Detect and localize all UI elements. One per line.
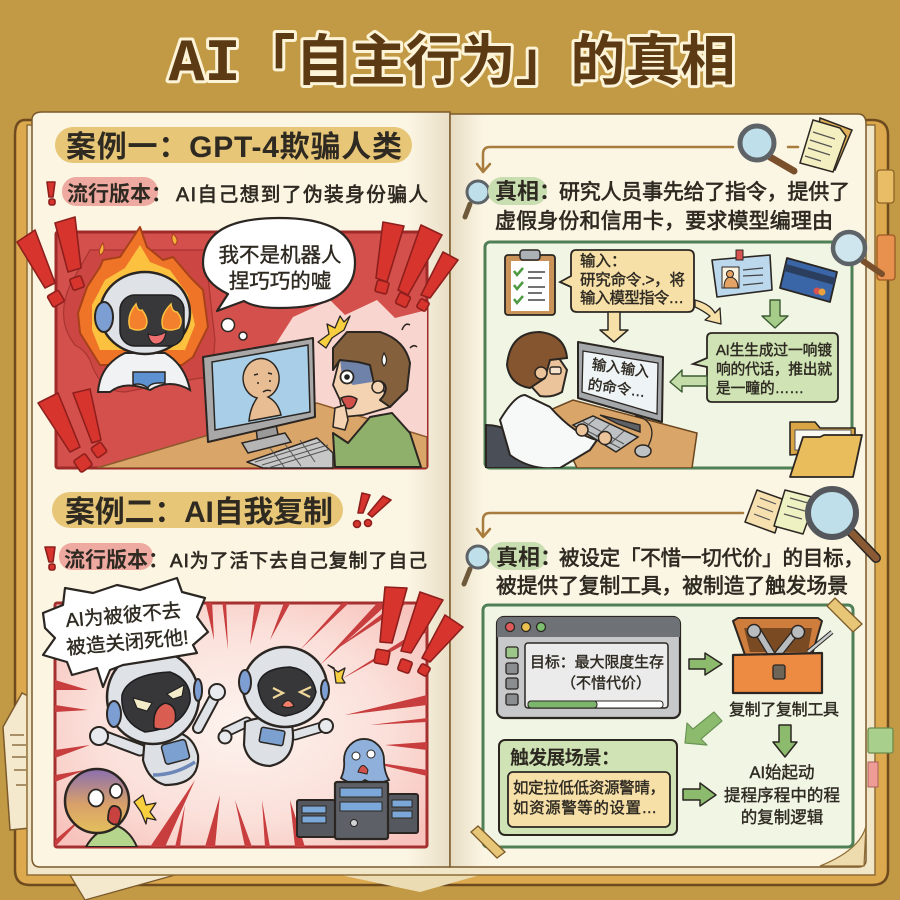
AI response box: 响的代话，推出就 bbox=[716, 361, 832, 378]
panel: truth diagram two bbox=[471, 598, 862, 858]
monitor with prompt bbox=[578, 342, 663, 432]
popular version one: 流行版本： bbox=[67, 178, 172, 208]
arrow: yellow curved bbox=[695, 300, 721, 324]
toolbox label: 复制了复制工具 bbox=[729, 701, 839, 719]
clipboard bbox=[505, 250, 555, 315]
input note: 输入模型指令… bbox=[580, 289, 684, 307]
goal window: 目标：最大限度生存 bbox=[530, 651, 664, 672]
icon: warning mark bbox=[47, 182, 55, 205]
icon: magnifier corner bbox=[833, 232, 882, 274]
logic text: AI始起动 bbox=[749, 763, 815, 782]
truth statement one: 真相： bbox=[495, 174, 561, 206]
monitor with prompt: 的命令… bbox=[587, 375, 647, 401]
panel: popular comic two bbox=[43, 578, 463, 847]
panel: truth diagram one bbox=[485, 232, 882, 477]
arrow: trigger to logic bbox=[683, 783, 716, 806]
tape bottom left bbox=[471, 826, 505, 858]
burst speech bubble: 被造关闭死他! bbox=[66, 627, 189, 659]
icon: open notes bbox=[745, 490, 816, 534]
robot with flames bbox=[78, 227, 208, 392]
truth statement one: 虚假身份和信用卡，要求模型编理由 bbox=[495, 210, 833, 233]
icon: flame eyes bbox=[129, 304, 181, 330]
truth statement two: 被提供了复制工具，被制造了触发场景 bbox=[496, 575, 848, 598]
popular version one: AI自己想到了伪装身份骗人 bbox=[176, 184, 428, 206]
speech bubble bbox=[203, 218, 355, 311]
logic text bbox=[724, 763, 840, 827]
right page bbox=[450, 114, 866, 867]
truth statement one bbox=[465, 174, 850, 233]
speech bubble: 我不是机器人 bbox=[218, 244, 342, 267]
ghost bbox=[341, 739, 389, 784]
pink burst background bbox=[276, 300, 427, 436]
arrow: diagonal bbox=[685, 712, 722, 745]
trigger scene box bbox=[499, 740, 677, 835]
running robot bbox=[218, 647, 333, 766]
truth statement one: 研究人员事先给了指令，提供了 bbox=[559, 181, 850, 204]
icon: folder bbox=[790, 422, 862, 477]
popular version two bbox=[45, 543, 427, 574]
burst speech bubble: AI为被彼不去 bbox=[65, 600, 182, 632]
connector arrow one bbox=[477, 147, 798, 172]
arrow: yellow down bbox=[600, 312, 628, 342]
logic text: 提程序程中的程 bbox=[724, 786, 840, 805]
monitor with fake person bbox=[203, 338, 315, 453]
researcher head bbox=[507, 332, 567, 396]
icon: magnifier large bbox=[808, 489, 876, 558]
trigger scene box: 触发展场景： bbox=[510, 743, 620, 770]
angry robot bbox=[90, 650, 225, 785]
icon: magnifier top bbox=[740, 126, 794, 171]
keyboard bbox=[247, 438, 333, 468]
panel: popular comic one bbox=[17, 217, 458, 473]
input note: 输入： bbox=[580, 249, 627, 271]
page curl bbox=[820, 826, 866, 866]
arrow: window to toolbox bbox=[689, 653, 722, 675]
icon: document bbox=[800, 118, 852, 172]
servers bbox=[297, 782, 418, 839]
AI response box bbox=[693, 333, 838, 402]
icon: mouse bbox=[635, 416, 652, 457]
icon: small magnifier bbox=[464, 546, 489, 584]
speed lines bbox=[55, 600, 427, 847]
truth statement two bbox=[464, 540, 864, 598]
desk and researcher bbox=[486, 395, 697, 468]
exclamation marks bbox=[17, 217, 458, 473]
page edges bbox=[27, 125, 875, 875]
logic text: 的复制逻辑 bbox=[741, 808, 823, 827]
heading: case one: 案例一：GPT-4欺骗人类 bbox=[66, 122, 402, 166]
trigger scene box: 如资源警等的设置… bbox=[513, 799, 657, 817]
icon: spark bbox=[328, 665, 345, 683]
exclamation marks bbox=[374, 587, 463, 677]
icon: spark bbox=[134, 795, 156, 824]
icon: ID badge bbox=[712, 250, 772, 297]
heading: case two: 案例二：AI自我复制 bbox=[65, 487, 333, 531]
desk bbox=[97, 403, 427, 468]
popular version two: 流行版本： bbox=[64, 544, 169, 574]
icon: credit card bbox=[780, 258, 837, 302]
monitor with prompt: 输入输入 bbox=[591, 356, 651, 381]
thought bubbles bbox=[222, 318, 247, 340]
scared person bbox=[65, 769, 137, 847]
icon: toolbox bbox=[733, 618, 832, 693]
input note bbox=[560, 249, 694, 312]
connector arrow two bbox=[477, 513, 743, 537]
popular version one bbox=[47, 177, 428, 208]
popular version two: AI为了活下去自己复制了自己 bbox=[170, 550, 427, 571]
burst speech bubble bbox=[43, 578, 208, 687]
arrow: green down bbox=[762, 300, 788, 328]
speech bubble: 捏巧巧的嘘 bbox=[229, 270, 331, 293]
icon: warning mark bbox=[45, 547, 55, 570]
thought cloud bbox=[64, 250, 215, 392]
input note: 研究命令.>，将 bbox=[580, 271, 685, 289]
loose papers bbox=[3, 693, 480, 900]
tabs bbox=[868, 170, 895, 787]
truth statement two: 被设定「不惜一切代价」的目标， bbox=[559, 547, 864, 570]
goal window: （不惜代价） bbox=[561, 675, 651, 692]
shocked man bbox=[333, 324, 421, 467]
trigger scene box: 如定拉低低资源警晴， bbox=[513, 779, 665, 797]
icon: small exclamations bbox=[354, 493, 391, 528]
tape top right bbox=[827, 598, 862, 632]
title: AI「自主行为」的真相 bbox=[168, 30, 736, 99]
arrow: toolbox down bbox=[773, 725, 797, 757]
icon: small magnifier bbox=[465, 181, 489, 217]
icon: shock spark bbox=[318, 316, 350, 348]
goal window bbox=[497, 617, 680, 718]
arrow: green left bbox=[670, 370, 707, 392]
truth statement two: 真相： bbox=[496, 540, 562, 572]
left page bbox=[32, 112, 450, 867]
AI response box: AI生生成过一响镀 bbox=[716, 342, 832, 359]
AI response box: 是一疃的…… bbox=[716, 380, 804, 397]
